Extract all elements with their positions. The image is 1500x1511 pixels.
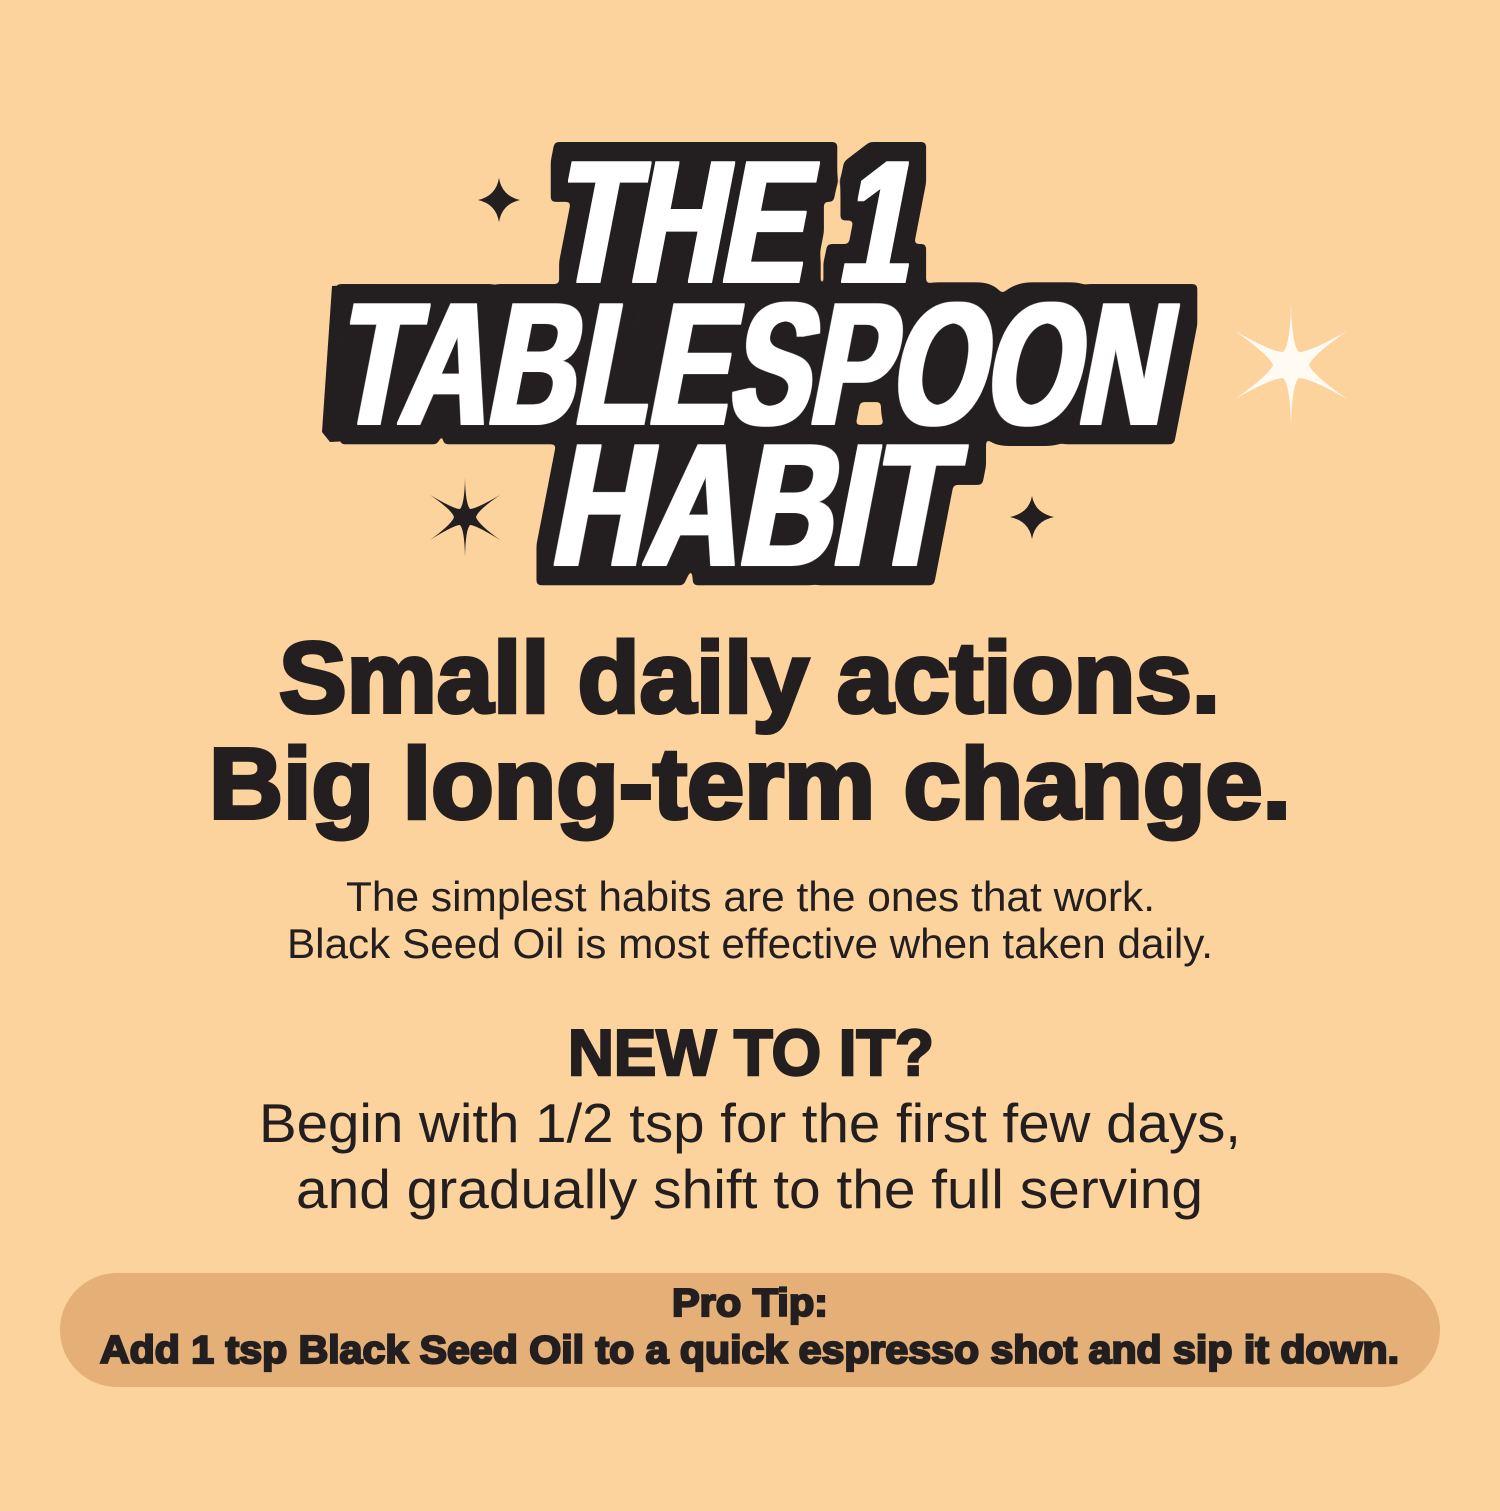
pro tip text bbox=[100, 1282, 1399, 1372]
pro tip text: Add 1 tsp Black Seed Oil to a quick espresso shot and sip it down. bbox=[100, 1329, 1399, 1372]
text block: beginner instructions: and gradually shift to the full serving bbox=[296, 1158, 1203, 1220]
icon: white six-ray sparkle right bbox=[1235, 300, 1347, 430]
title: The 1 Tablespoon Habit: THE 1 bbox=[543, 125, 936, 320]
pro tip text: Pro Tip: bbox=[672, 1282, 828, 1325]
text block: simplest habits: Black Seed Oil is most effective when taken daily. bbox=[287, 920, 1213, 967]
title: The 1 Tablespoon Habit: HABIT bbox=[541, 408, 974, 603]
text block: beginner instructions bbox=[259, 1092, 1241, 1220]
pro tip pill background bbox=[60, 1273, 1440, 1387]
text block: beginner instructions: Begin with 1/2 tsp for the first few days, bbox=[259, 1092, 1241, 1154]
heading: Small daily actions. Big long-term change.: Big long-term change. bbox=[209, 728, 1291, 840]
title: The 1 Tablespoon Habit bbox=[322, 125, 1192, 603]
title: The 1 Tablespoon Habit: HABIT bbox=[541, 408, 974, 603]
icon: black six-ray sparkle bottom left bbox=[430, 478, 500, 557]
title: The 1 Tablespoon Habit: THE 1 bbox=[543, 125, 936, 320]
text block: simplest habits: The simplest habits are the ones that work. bbox=[346, 873, 1155, 920]
icon: black four-point sparkle bottom right bbox=[1010, 496, 1054, 539]
heading: New to it?: NEW TO IT? bbox=[568, 1016, 934, 1089]
heading: Small daily actions. Big long-term change. bbox=[209, 622, 1291, 840]
panel: pro tip bbox=[60, 1273, 1440, 1387]
text block: simplest habits bbox=[287, 873, 1213, 967]
icon: black four-point sparkle top left bbox=[478, 178, 520, 222]
heading: Small daily actions. Big long-term change.: Small daily actions. bbox=[279, 622, 1220, 734]
